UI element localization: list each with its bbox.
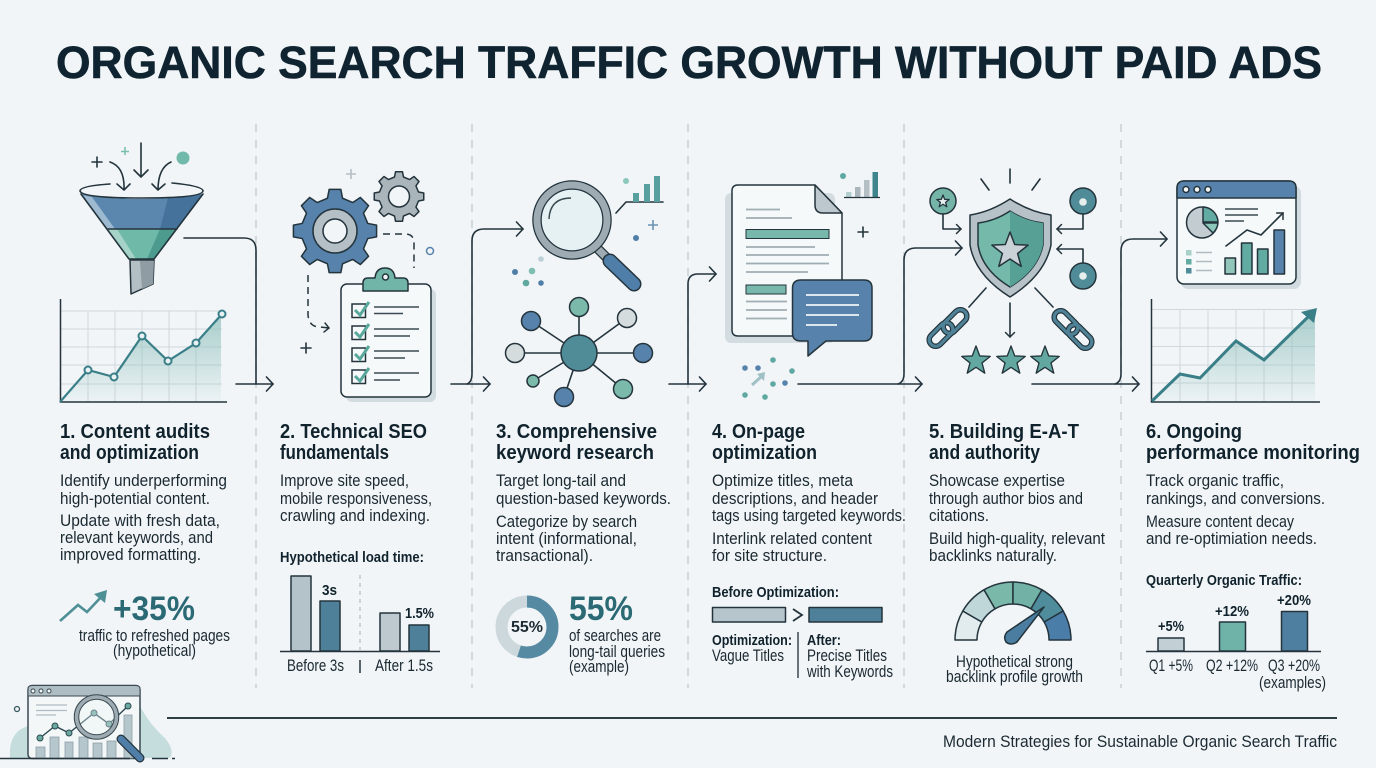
- text: step 3 body: [496, 472, 671, 565]
- text: step 3 body: question-based keywords.: [496, 490, 671, 508]
- bar chart: load time: Before 3s: [287, 657, 344, 675]
- comparison: before and after optimization: Vague Titles: [712, 647, 784, 665]
- text: step 5 body: Build high-quality, relevant: [929, 530, 1105, 548]
- heading: step 4: optimization: [712, 442, 817, 464]
- icon: browser with magnifier: [0, 686, 175, 758]
- comparison: before and after optimization: [712, 584, 893, 681]
- stat: 55% long-tail: (example): [569, 658, 629, 676]
- text: step 1 body: improved formatting.: [60, 546, 201, 564]
- flow arrow: step 4 to step 5: [798, 248, 962, 384]
- text: step 6 body: [1146, 472, 1325, 548]
- chart: growth trend: [1152, 299, 1320, 402]
- footer text: Modern Strategies for Sustainable Organic Search Traffic: [943, 733, 1337, 751]
- flow arrow: step 1 to step 2: [184, 238, 273, 384]
- text: step 3 body: transactional).: [496, 547, 593, 565]
- text: step 4 body: Interlink related content: [712, 530, 872, 548]
- text: step 1 body: Identify underperforming: [60, 472, 227, 490]
- bar chart: load time: Hypothetical load time:: [280, 549, 424, 566]
- donut chart: 55%: [502, 602, 552, 652]
- text: step 6 body: Track organic traffic,: [1146, 472, 1284, 490]
- text: step 4 body: Optimize titles, meta: [712, 472, 854, 490]
- text: step 5 body: through author bios and: [929, 490, 1083, 508]
- heading: step 1: [60, 421, 210, 464]
- bar chart: load time: 1.5%: [405, 605, 434, 622]
- icon: analytics dashboard: [1177, 181, 1301, 289]
- text: step 5 body: citations.: [929, 507, 989, 525]
- flow arrow: step 5 to step 6: [1032, 239, 1167, 384]
- icon: shield with links and stars: [927, 169, 1096, 373]
- footer rule: [167, 717, 1337, 719]
- heading: step 6: [1146, 421, 1360, 464]
- flow arrow: step 2 to step 3: [451, 229, 523, 384]
- bar chart: load time: [280, 549, 440, 675]
- text: step 1 body: [60, 472, 227, 564]
- comparison: before and after optimization: Precise Titles: [807, 647, 887, 665]
- heading: step 2: [280, 421, 427, 464]
- text: step 2 body: mobile responsiveness,: [280, 490, 432, 508]
- bar chart: quarterly organic traffic: +12%: [1215, 603, 1249, 620]
- comparison: before and after optimization: Optimization:: [712, 632, 792, 649]
- text: step 6 body: Measure content decay: [1146, 513, 1295, 531]
- bar chart: quarterly organic traffic: Q1 +5%: [1149, 657, 1193, 675]
- bar chart: quarterly organic traffic: Quarterly Organic Traffic:: [1146, 572, 1302, 589]
- stat: 55% long-tail: 55%: [569, 590, 633, 628]
- text: step 5 body: Showcase expertise: [929, 472, 1065, 490]
- gauge: backlink profile growth: Hypothetical strong: [956, 653, 1073, 671]
- text: step 3 body: Target long-tail and: [496, 472, 626, 490]
- bar chart: quarterly organic traffic: +20%: [1277, 592, 1311, 609]
- gauge: backlink profile growth: [946, 582, 1083, 686]
- bar chart: load time: After 1.5s: [375, 657, 433, 675]
- heading: step 2: fundamentals: [280, 442, 389, 464]
- heading: step 3: [496, 421, 657, 464]
- stat: +35% traffic: (hypothetical): [113, 642, 196, 660]
- text: step 2 body: Improve site speed,: [280, 472, 409, 490]
- text: step 5 body: backlinks naturally.: [929, 547, 1057, 565]
- text: step 1 body: Update with fresh data,: [60, 512, 220, 530]
- text: step 1 body: high-potential content.: [60, 490, 210, 508]
- icon: magnifier: [512, 176, 663, 286]
- heading: step 5: 5. Building E-A-T: [929, 421, 1079, 443]
- heading: step 1: and optimization: [60, 442, 199, 464]
- text: step 6 body: and re-optimiation needs.: [1146, 530, 1317, 548]
- bar chart: quarterly organic traffic: Q2 +12%: [1206, 657, 1258, 675]
- comparison: before and after optimization: Before Optimization:: [712, 584, 839, 601]
- text: step 4 body: [712, 472, 906, 565]
- text: step 6 body: rankings, and conversions.: [1146, 490, 1325, 508]
- text: step 4 body: descriptions, and header: [712, 490, 878, 508]
- stat: 55% long-tail: of searches are: [569, 627, 661, 645]
- stat: +35% traffic: traffic to refreshed pages: [79, 627, 230, 645]
- bar chart: quarterly organic traffic: Q3 +20%: [1268, 657, 1320, 675]
- heading: step 3: keyword research: [496, 442, 654, 464]
- heading: step 5: and authority: [929, 442, 1041, 464]
- heading: step 4: 4. On-page: [712, 421, 805, 443]
- bar chart: quarterly organic traffic: [1146, 572, 1326, 692]
- heading: step 6: performance monitoring: [1146, 442, 1360, 464]
- text: step 4 body: for site structure.: [712, 547, 827, 565]
- heading: step 5: [929, 421, 1079, 464]
- comparison: before and after optimization: with Keywords: [806, 663, 893, 681]
- stat: 55% long-tail: [569, 590, 665, 676]
- icon: keyword network: [506, 298, 652, 406]
- text: step 3 body: Categorize by search: [496, 513, 637, 531]
- text: step 2 body: crawling and indexing.: [280, 507, 430, 525]
- heading: step 3: 3. Comprehensive: [496, 421, 657, 443]
- heading: step 1: 1. Content audits: [60, 421, 210, 443]
- heading: step 4: [712, 421, 817, 464]
- stat: +35% traffic: +35%: [113, 590, 195, 628]
- chart: content growth line: [60, 299, 227, 402]
- gauge: backlink profile growth: backlink profile growth: [946, 668, 1083, 686]
- bar chart: load time: 3s: [322, 582, 337, 599]
- bar chart: quarterly organic traffic: +5%: [1158, 618, 1184, 635]
- heading: step 2: 2. Technical SEO: [280, 421, 427, 443]
- heading: step 6: 6. Ongoing: [1146, 421, 1242, 443]
- text: step 5 body: [929, 472, 1105, 565]
- icon: funnel: [80, 143, 203, 294]
- icon: document and speech bubble: [725, 172, 880, 400]
- text: step 2 body: [280, 472, 432, 525]
- donut chart: 55%: 55%: [511, 619, 543, 636]
- text: step 1 body: relevant keywords, and: [60, 529, 213, 547]
- title: ORGANIC SEARCH TRAFFIC GROWTH WITHOUT PAID ADS: [56, 37, 1322, 88]
- text: step 4 body: tags using targeted keywords.: [712, 507, 906, 525]
- stat: 55% long-tail: long-tail queries: [569, 643, 665, 661]
- text: step 3 body: intent (informational,: [496, 530, 637, 548]
- bar chart: quarterly organic traffic: (examples): [1259, 674, 1326, 692]
- icon: gears and checklist: [293, 169, 436, 402]
- flow arrow: step 3 to step 4: [669, 274, 716, 384]
- comparison: before and after optimization: After:: [807, 632, 841, 649]
- stat: +35% traffic: [60, 590, 230, 660]
